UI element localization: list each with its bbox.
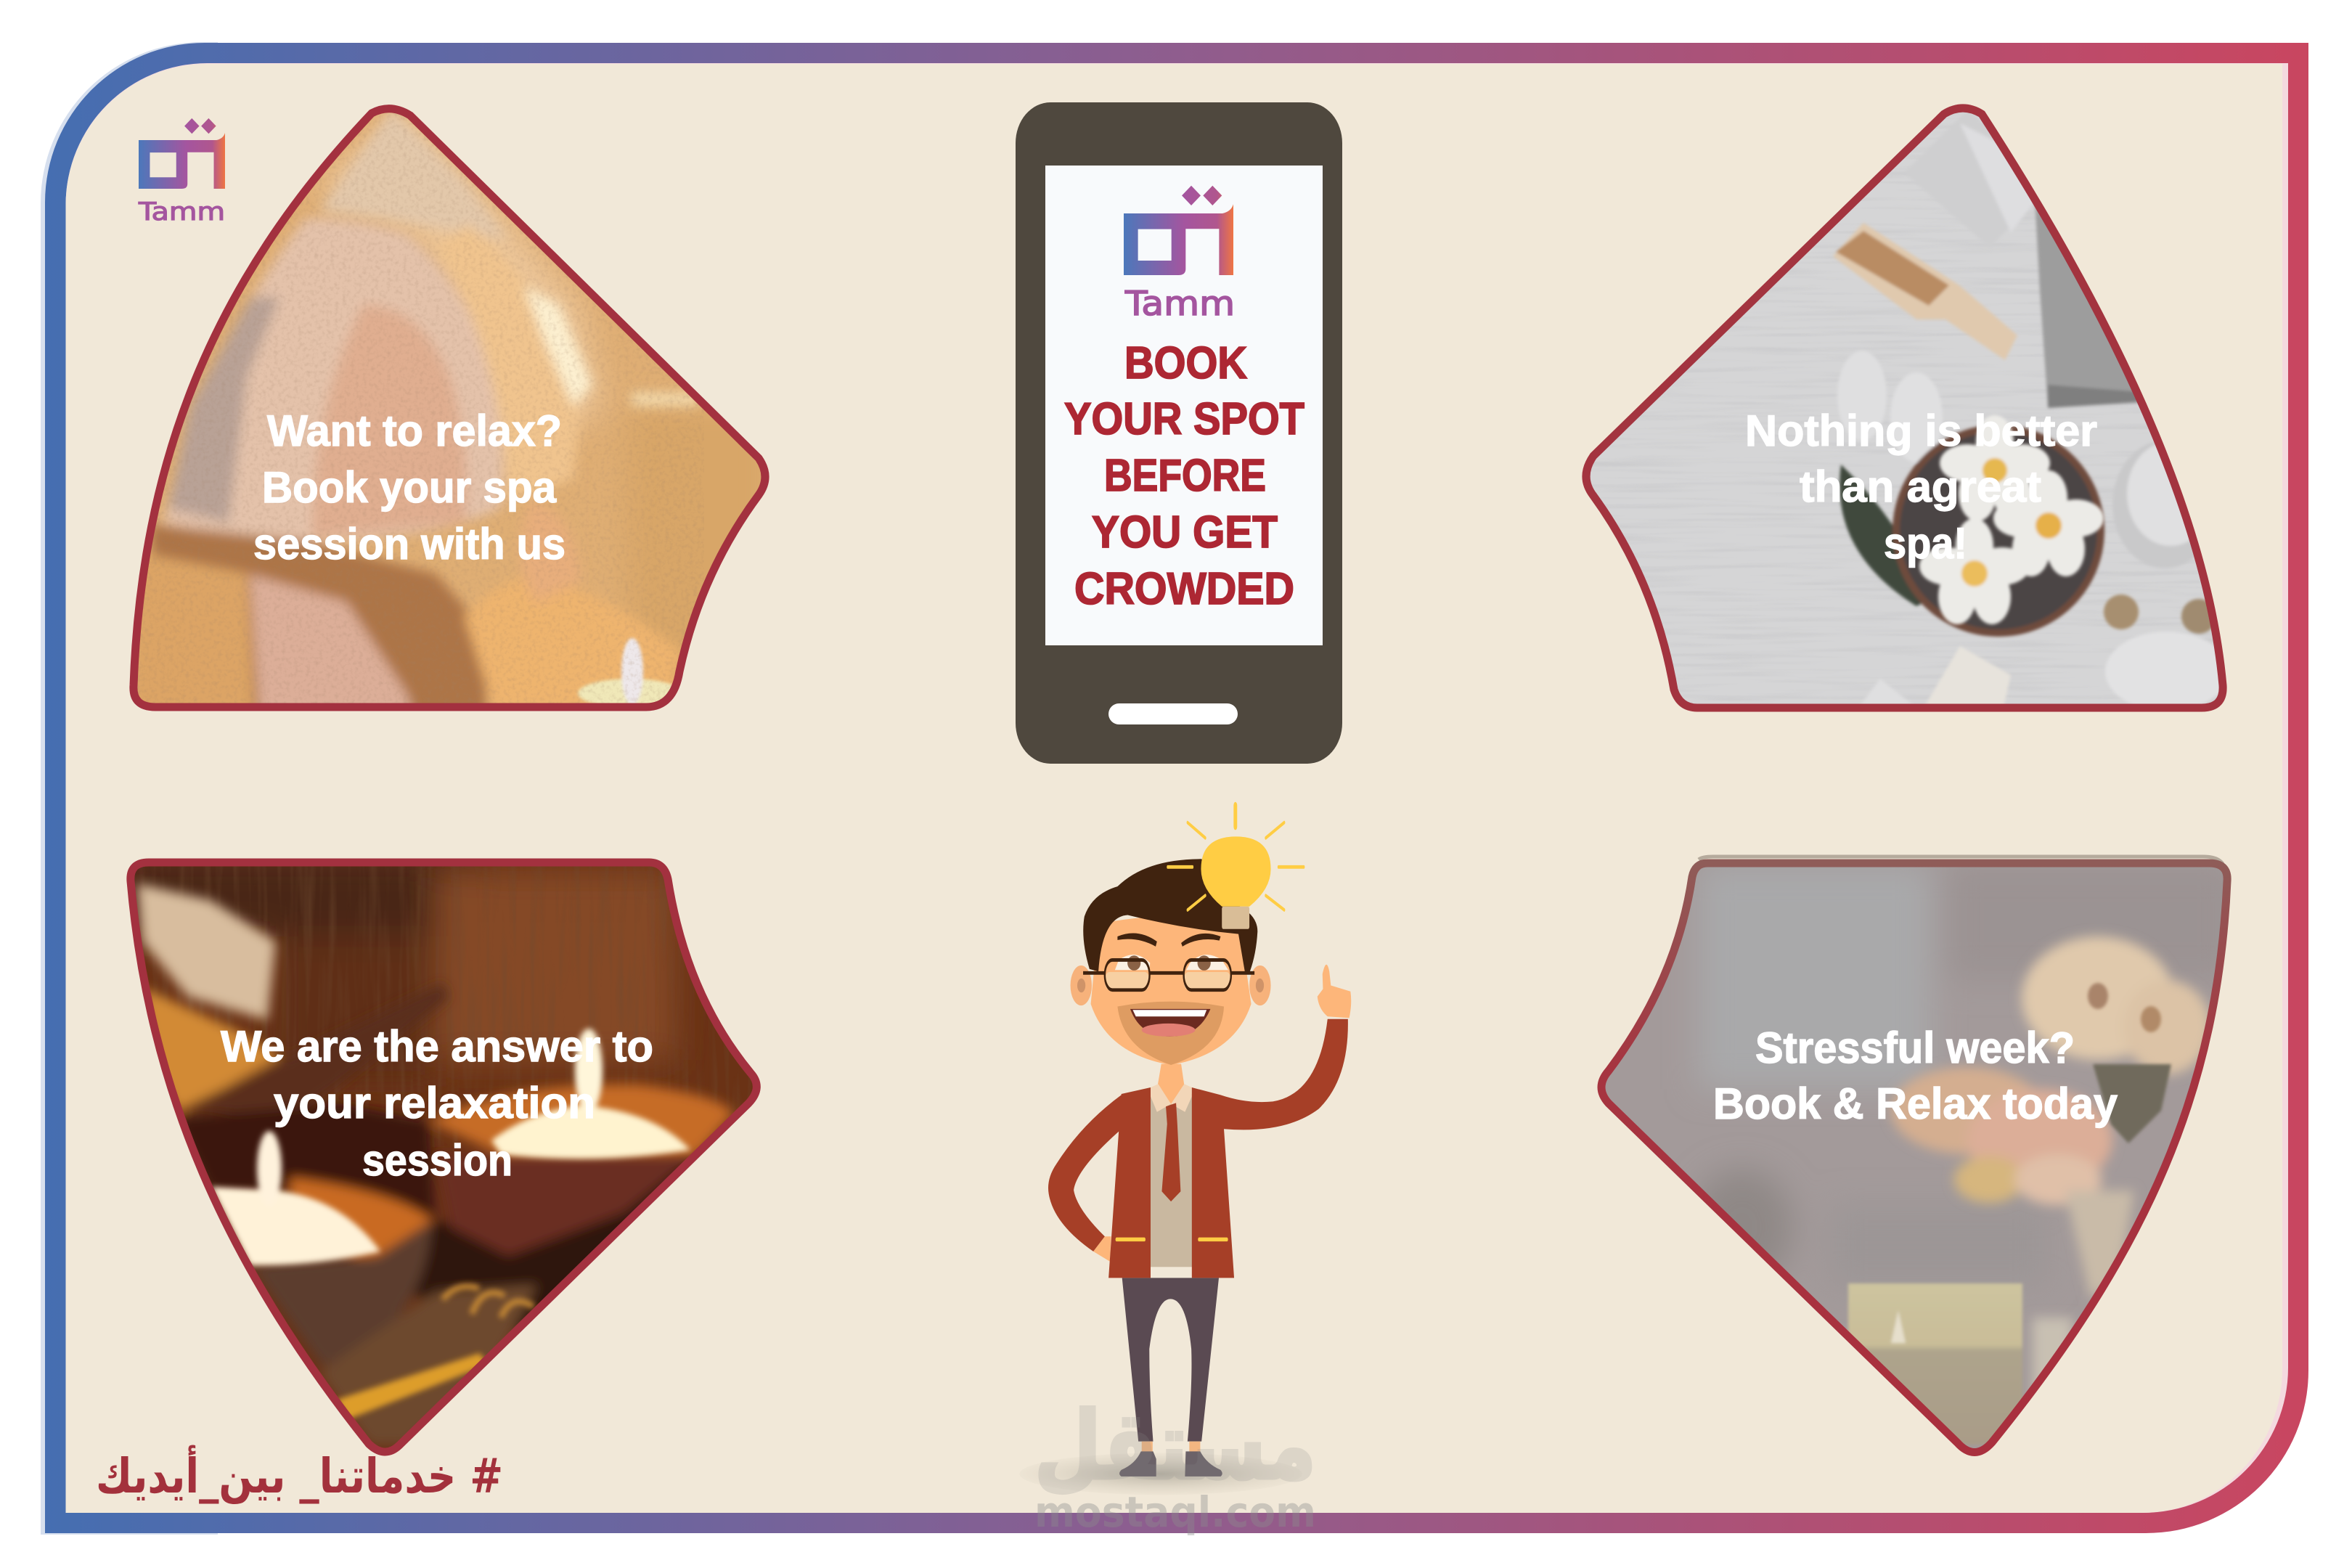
photo: candles in bowls (123, 857, 769, 1459)
panel: spa table photo (1575, 102, 2236, 719)
ground shadow (1019, 1453, 1302, 1495)
light rays (1168, 806, 1304, 910)
phone home button (1108, 703, 1238, 724)
logo: Tamm in phone: Tamm (1124, 284, 1235, 323)
panel outline (131, 862, 756, 1452)
panel outline (1586, 108, 2223, 708)
phone message text: YOU GET (1092, 507, 1278, 558)
panel text: Stressful week? (1755, 1024, 2075, 1072)
logo: Tamm top left: Tamm (138, 197, 225, 226)
jacket and sleeves (1048, 1019, 1348, 1278)
panel text (221, 1022, 653, 1185)
phone message text (1064, 338, 1304, 614)
phone message text: CROWDED (1074, 564, 1294, 614)
shirt (1150, 1094, 1193, 1267)
phone message text: YOUR SPOT (1064, 394, 1304, 444)
logo: Tamm in phone (1124, 186, 1235, 323)
pocket lines (1116, 1238, 1228, 1241)
neck (1158, 1064, 1184, 1105)
panel text: Nothing is better (1745, 407, 2097, 455)
photo: muted flowers (1597, 857, 2236, 1459)
phone with message (1016, 102, 1342, 764)
panel text: session (362, 1136, 513, 1185)
phone message text: BEFORE (1104, 451, 1266, 501)
tie (1161, 1103, 1180, 1201)
watermark: مستقل (1034, 1392, 1316, 1500)
socks and shoes (1119, 1442, 1222, 1477)
phone message text: BOOK (1124, 338, 1247, 388)
illustration: man with idea (1019, 806, 1351, 1495)
panel text: your relaxation (274, 1079, 595, 1127)
panel: relax towels photo (123, 102, 777, 719)
panel text (253, 407, 565, 568)
photo: towels and scoop (123, 102, 777, 719)
panel: candles photo (123, 857, 769, 1459)
head (1071, 859, 1271, 1065)
panel text: Book your spa (262, 463, 557, 512)
panel text: Want to relax? (267, 407, 562, 455)
panel text: spa! (1884, 519, 1967, 568)
panel text (1745, 407, 2097, 568)
panel top edge shade (1699, 857, 2223, 864)
panel outline (134, 109, 765, 707)
panel: flowers and candle photo (1597, 857, 2236, 1459)
pointing hand (1318, 965, 1351, 1018)
panel outline (1601, 863, 2227, 1452)
collar (1151, 1084, 1192, 1112)
panel text: than agreat (1800, 462, 2041, 511)
photo: floating flowers (1919, 415, 2104, 624)
phone screen (1045, 166, 1323, 645)
photo: flowers, bowl, scoop (1575, 102, 2236, 719)
panel text (1713, 1024, 2118, 1128)
panel text: We are the answer to (221, 1022, 653, 1071)
watermark: mostaql.com (1034, 1487, 1316, 1537)
trousers (1122, 1278, 1219, 1442)
hashtag in Arabic: # خدماتنا_ بين_أيديك (96, 1445, 503, 1504)
hand on hip (1093, 1236, 1111, 1262)
light bulb (1201, 836, 1271, 929)
watermark (1034, 1392, 1316, 1537)
phone body (1016, 102, 1342, 764)
panel text: session with us (253, 520, 565, 568)
logo: Tamm top left (138, 118, 225, 226)
panel text: Book & Relax today (1713, 1079, 2118, 1128)
